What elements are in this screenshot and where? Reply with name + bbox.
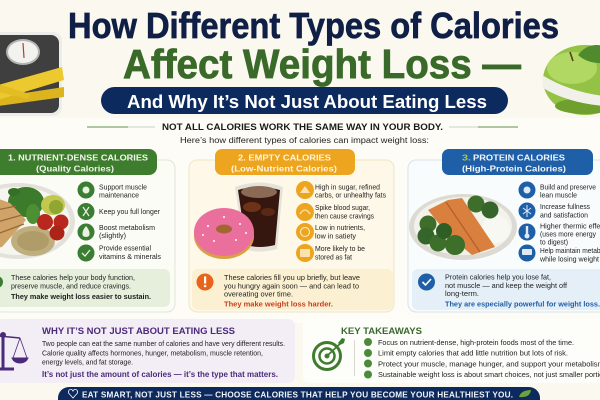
icon list: low in satiety — [315, 232, 356, 240]
callout: They are especially powerful for weight loss. — [445, 300, 600, 308]
callout: These calories fill you up briefly, but leave — [224, 273, 360, 282]
food plate: salmon, broccoli, rice — [409, 194, 517, 260]
panel: why it's not just about eating less: WHY IT’S NOT JUST ABOUT EATING LESS — [42, 326, 235, 337]
icon list: vitamins & minerals — [99, 252, 161, 261]
panel: why it's not just about eating less — [0, 319, 295, 383]
icon: balance scale — [0, 332, 28, 369]
card heading: 1. NUTRIENT-DENSE CALORIES — [8, 154, 149, 162]
card heading: (High-Protein Calories) — [462, 164, 566, 174]
callout: you hungry again soon — and can lead to — [224, 282, 359, 290]
panel: why it's not just about eating less: energy levels, and fat storage. — [42, 358, 133, 366]
icon: green apple with tape — [542, 45, 600, 115]
icon list: Keep you full longer — [99, 207, 160, 216]
callout — [192, 269, 393, 310]
icon list: Low in nutrients, — [315, 223, 365, 232]
icon: target with arrow — [314, 338, 345, 370]
icon list: while losing weight — [539, 254, 599, 264]
icon list: Build and preserve — [540, 182, 596, 192]
callout: Protein calories help you lose fat, — [445, 272, 551, 282]
callout: not muscle — and keep the weight off — [445, 281, 568, 290]
intro text — [87, 122, 518, 145]
callout: These calories help your body function, — [11, 273, 135, 282]
icon list: Spike blood sugar, — [315, 203, 370, 212]
panel: why it's not just about eating less: Calorie quality affects hormones, hunger, metabolism, muscle retention, — [42, 348, 263, 358]
panel: key takeaways — [303, 319, 600, 383]
icon list: Increase fullness — [540, 202, 590, 211]
icon list — [518, 182, 600, 264]
card heading: 2. EMPTY CALORIES — [238, 152, 331, 162]
panel: why it's not just about eating less: It’s not just the amount of calories — it’s the type that matters. — [42, 369, 278, 379]
panel: key takeaways: Focus on nutrient-dense, high-protein foods most of the time. — [378, 338, 574, 347]
card heading: (Quality Calories) — [36, 164, 114, 174]
icon list: maintenance — [99, 190, 139, 200]
footer banner: EAT SMART, NOT JUST LESS — CHOOSE CALORIES THAT HELP YOU BECOME YOUR HEALTHIEST YOU. — [82, 390, 513, 400]
icon list — [78, 182, 161, 262]
icon list: stored as fat — [315, 252, 352, 262]
icon list: (slightly) — [99, 231, 126, 240]
icon list: then cause cravings — [315, 212, 374, 220]
icon list: to digest) — [540, 238, 568, 246]
subtitle pill: And Why It’s Not Just About Eating Less — [127, 91, 487, 112]
callout: long-term. — [445, 289, 479, 298]
food plate: chicken, greens, avocado, tomato, quinoa — [0, 183, 75, 259]
icon list: Boost metabolism — [99, 223, 155, 232]
panel: key takeaways: KEY TAKEAWAYS — [341, 326, 422, 337]
card heading: (Low-Nutrient Calories) — [231, 164, 337, 174]
title — [68, 5, 559, 87]
callout — [412, 269, 600, 310]
panel: key takeaways: Protect your muscle, manage hunger, and support your metabolism. — [378, 360, 600, 368]
subtitle pill — [101, 87, 508, 114]
icon list: Support muscle — [99, 182, 147, 192]
title: How Different Types of Calories — [68, 5, 559, 46]
panel: protein calories — [408, 149, 600, 312]
panel: nutrient-dense calories — [0, 149, 175, 312]
card heading — [215, 149, 355, 175]
panel: why it's not just about eating less: Two people can eat the same number of calories and have very different results. — [42, 339, 285, 348]
icon list: Provide essential — [99, 244, 151, 252]
card heading — [442, 149, 593, 175]
card heading: PROTEIN CALORIES — [473, 152, 565, 162]
icon list: carbs, or unhealthy fats — [315, 190, 386, 200]
card heading — [0, 149, 157, 175]
footer banner — [58, 387, 540, 400]
icon list: and satisfaction — [540, 210, 588, 220]
icon list: High in sugar, refined — [315, 182, 380, 192]
callout: They make weight loss easier to sustain. — [11, 292, 151, 301]
callout: preserve muscle, and reduce cravings. — [11, 282, 131, 290]
icon list — [296, 181, 386, 262]
icon: bathroom scale with measuring tape — [0, 32, 64, 116]
callout — [0, 269, 170, 307]
icon list: (uses more energy — [540, 230, 596, 238]
panel: empty calories — [189, 149, 394, 312]
callout: overeating over time. — [224, 290, 293, 298]
callout: They make weight loss harder. — [224, 300, 333, 308]
icon list: More likely to be — [315, 244, 365, 253]
intro text: Here’s how different types of calories can impact weight loss: — [180, 135, 429, 145]
food: cola glass and pink donut — [194, 182, 283, 259]
icon list: lean muscle — [540, 190, 577, 200]
title: Affect Weight Loss — — [123, 41, 521, 87]
card heading: 3. — [462, 152, 471, 162]
intro text: NOT ALL CALORIES WORK THE SAME WAY IN YOUR BODY. — [162, 122, 443, 133]
panel: key takeaways: Limit empty calories that add little nutrition but lots of risk. — [378, 348, 568, 358]
